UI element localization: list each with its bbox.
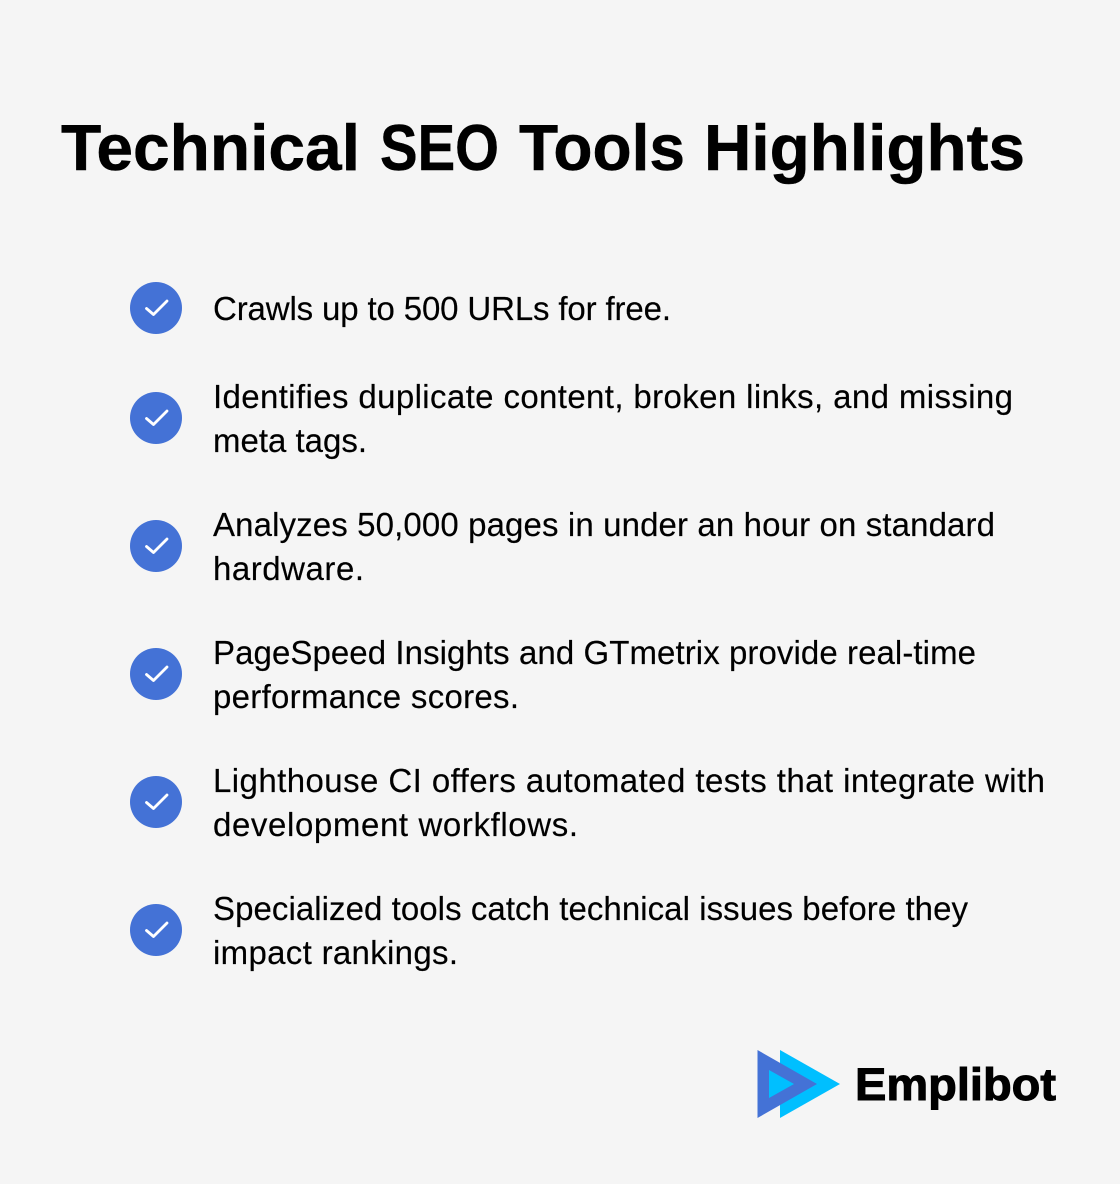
icon: check 2 <box>130 392 182 444</box>
title: Technical <box>61 111 360 184</box>
icon: check 3 <box>130 520 182 572</box>
text: item 5 <box>213 762 1045 843</box>
item 2 <box>130 378 1013 459</box>
text: item 4 <box>213 634 976 715</box>
title: Tools <box>519 111 685 184</box>
item 5 <box>130 762 1045 843</box>
title: Highlights <box>704 111 1025 184</box>
text: item 4: PageSpeed Insights and GTmetrix provide real-time <box>213 634 976 671</box>
logo: Emplibot <box>758 1050 1056 1118</box>
text: item 6 <box>213 890 968 971</box>
text: item 6: impact rankings. <box>213 934 458 971</box>
text: item 2: meta tags. <box>213 422 367 459</box>
text: item 5: development workflows. <box>213 806 578 843</box>
text: item 4: performance scores. <box>213 678 519 715</box>
item 6 <box>130 890 968 971</box>
item 3 <box>130 506 995 587</box>
item 4 <box>130 634 976 715</box>
text: item 5: Lighthouse CI offers automated tests that integrate with <box>213 762 1045 799</box>
list of highlights <box>130 282 1045 971</box>
icon: check 5 <box>130 776 182 828</box>
text: item 6: Specialized tools catch technical issues before they <box>213 890 968 927</box>
text: item 2 <box>213 378 1013 459</box>
item 1 <box>130 282 671 334</box>
icon: check 4 <box>130 648 182 700</box>
title: SEO <box>380 111 499 184</box>
icon: check 1 <box>130 282 182 334</box>
text: item 3: hardware. <box>213 550 364 587</box>
icon: check 6 <box>130 904 182 956</box>
text: item 3: Analyzes 50,000 pages in under an hour on standard <box>213 506 995 543</box>
icon: play triangles <box>758 1050 840 1118</box>
wordmark: Emplibot <box>855 1059 1056 1110</box>
text: item 2: Identifies duplicate content, broken links, and missing <box>213 378 1013 415</box>
text: item 1: Crawls up to 500 URLs for free. <box>213 290 671 327</box>
title <box>61 111 1025 184</box>
text: item 3 <box>213 506 995 587</box>
